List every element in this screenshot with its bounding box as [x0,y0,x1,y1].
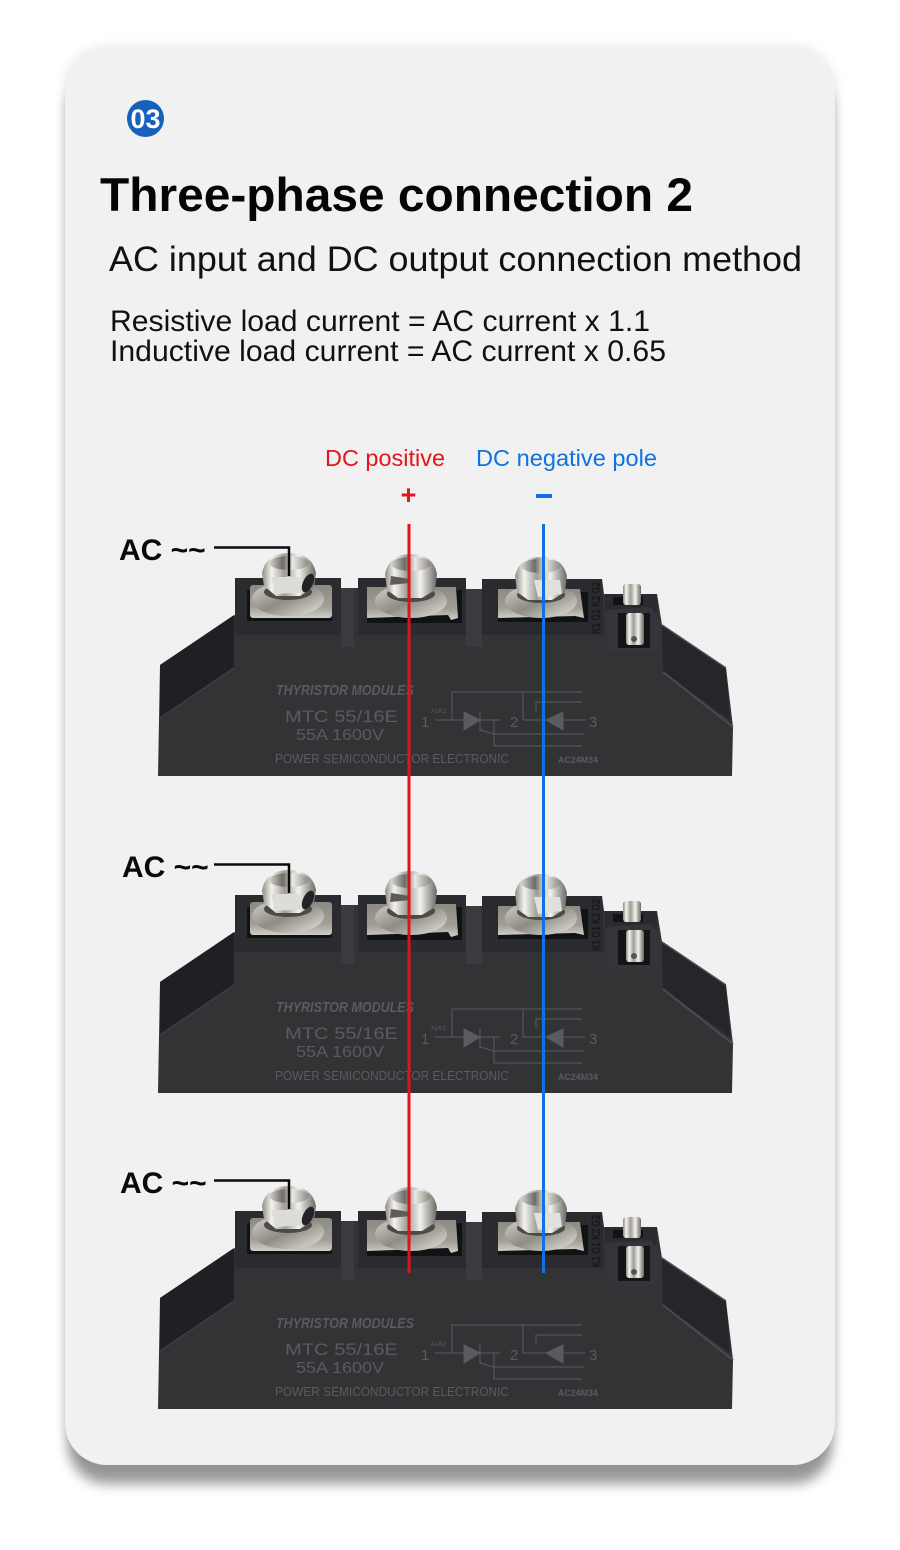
module label text: MTC 55/16E [285,1340,398,1359]
text block: load current formulas: Inductive load current = AC current x 0.65 [110,335,666,368]
module label text: MTC 55/16E [285,1024,398,1043]
module label text: AC24M34 [558,1388,598,1398]
circuit symbol: 2 [510,1031,518,1048]
module label text: AC24M34 [558,1072,598,1082]
module label text: 55A 1600V [296,1360,385,1377]
module label text [275,682,598,766]
right auxiliary terminals [605,584,662,653]
AC connection 2 [122,851,289,893]
circuit symbol [421,1325,597,1379]
thyristor module 2 [158,870,733,1093]
icon: number badge 03 [127,100,164,137]
terminal nut A [247,870,332,938]
icon: number badge 03: 03 [130,104,161,134]
circuit symbol: A1K2 [431,1342,446,1348]
module label text: THYRISTOR MODULES [276,1315,414,1332]
circuit symbol: 3 [589,1031,597,1048]
module label text: 55A 1600V [296,1044,385,1061]
thyristor module 2: K1 G1 K2 G2 [589,899,603,951]
terminal nut C [498,557,588,622]
module label text: POWER SEMICONDUCTOR ELECTRONIC [275,1068,509,1083]
text block: load current formulas: Resistive load current = AC current x 1.1 [110,305,650,338]
AC connection 1 [119,534,289,576]
thyristor module 3 [158,1186,733,1409]
terminal nut A [247,553,332,621]
circuit symbol: 2 [510,714,518,731]
circuit symbol [421,1009,597,1063]
circuit symbol: A1K2 [431,1026,446,1032]
module label text: AC24M34 [558,755,598,765]
module label text [275,1315,598,1399]
circuit symbol: 2 [510,1347,518,1364]
AC connection 2: AC ~~ [122,851,209,884]
terminal nut B [367,871,462,940]
right auxiliary terminals [605,1217,662,1286]
thyristor module 1: K1 G1 K2 G2 [589,582,603,634]
AC connection 3 [120,1167,289,1209]
module label text: THYRISTOR MODULES [276,682,414,699]
terminal nut A [247,1186,332,1254]
text block: load current formulas [110,305,666,368]
circuit symbol [421,692,597,746]
circuit symbol: 3 [589,714,597,731]
module label text: THYRISTOR MODULES [276,999,414,1016]
title: Three-phase connection 2 [100,168,693,221]
DC negative wire [542,524,545,1273]
module label text: POWER SEMICONDUCTOR ELECTRONIC [275,1384,509,1399]
circuit symbol: 1 [421,1347,429,1364]
DC positive wire [408,524,410,1273]
label: DC positive: DC positive [325,445,445,471]
terminal nut B [367,1187,462,1256]
thyristor module 3: K1 G1 K2 G2 [589,1215,603,1267]
right auxiliary terminals [605,901,662,970]
terminal nut B [367,554,462,623]
AC connection 1: AC ~~ [119,534,206,567]
icon: minus sign [536,494,552,498]
subtitle: AC input and DC output connection method [109,239,802,279]
AC connection 3: AC ~~ [120,1167,207,1200]
circuit symbol: 3 [589,1347,597,1364]
module label text [275,999,598,1083]
panel: card background [65,47,835,1465]
circuit symbol: 1 [421,1031,429,1048]
icon: plus sign: + [401,480,416,510]
module label text: 55A 1600V [296,727,385,744]
terminal nut C [498,1190,588,1255]
label: DC negative pole: DC negative pole [476,445,657,471]
thyristor module 1 [158,553,733,776]
module label text: MTC 55/16E [285,707,398,726]
module label text: POWER SEMICONDUCTOR ELECTRONIC [275,751,509,766]
circuit symbol: 1 [421,714,429,731]
terminal nut C [498,874,588,939]
circuit symbol: A1K2 [431,709,446,715]
